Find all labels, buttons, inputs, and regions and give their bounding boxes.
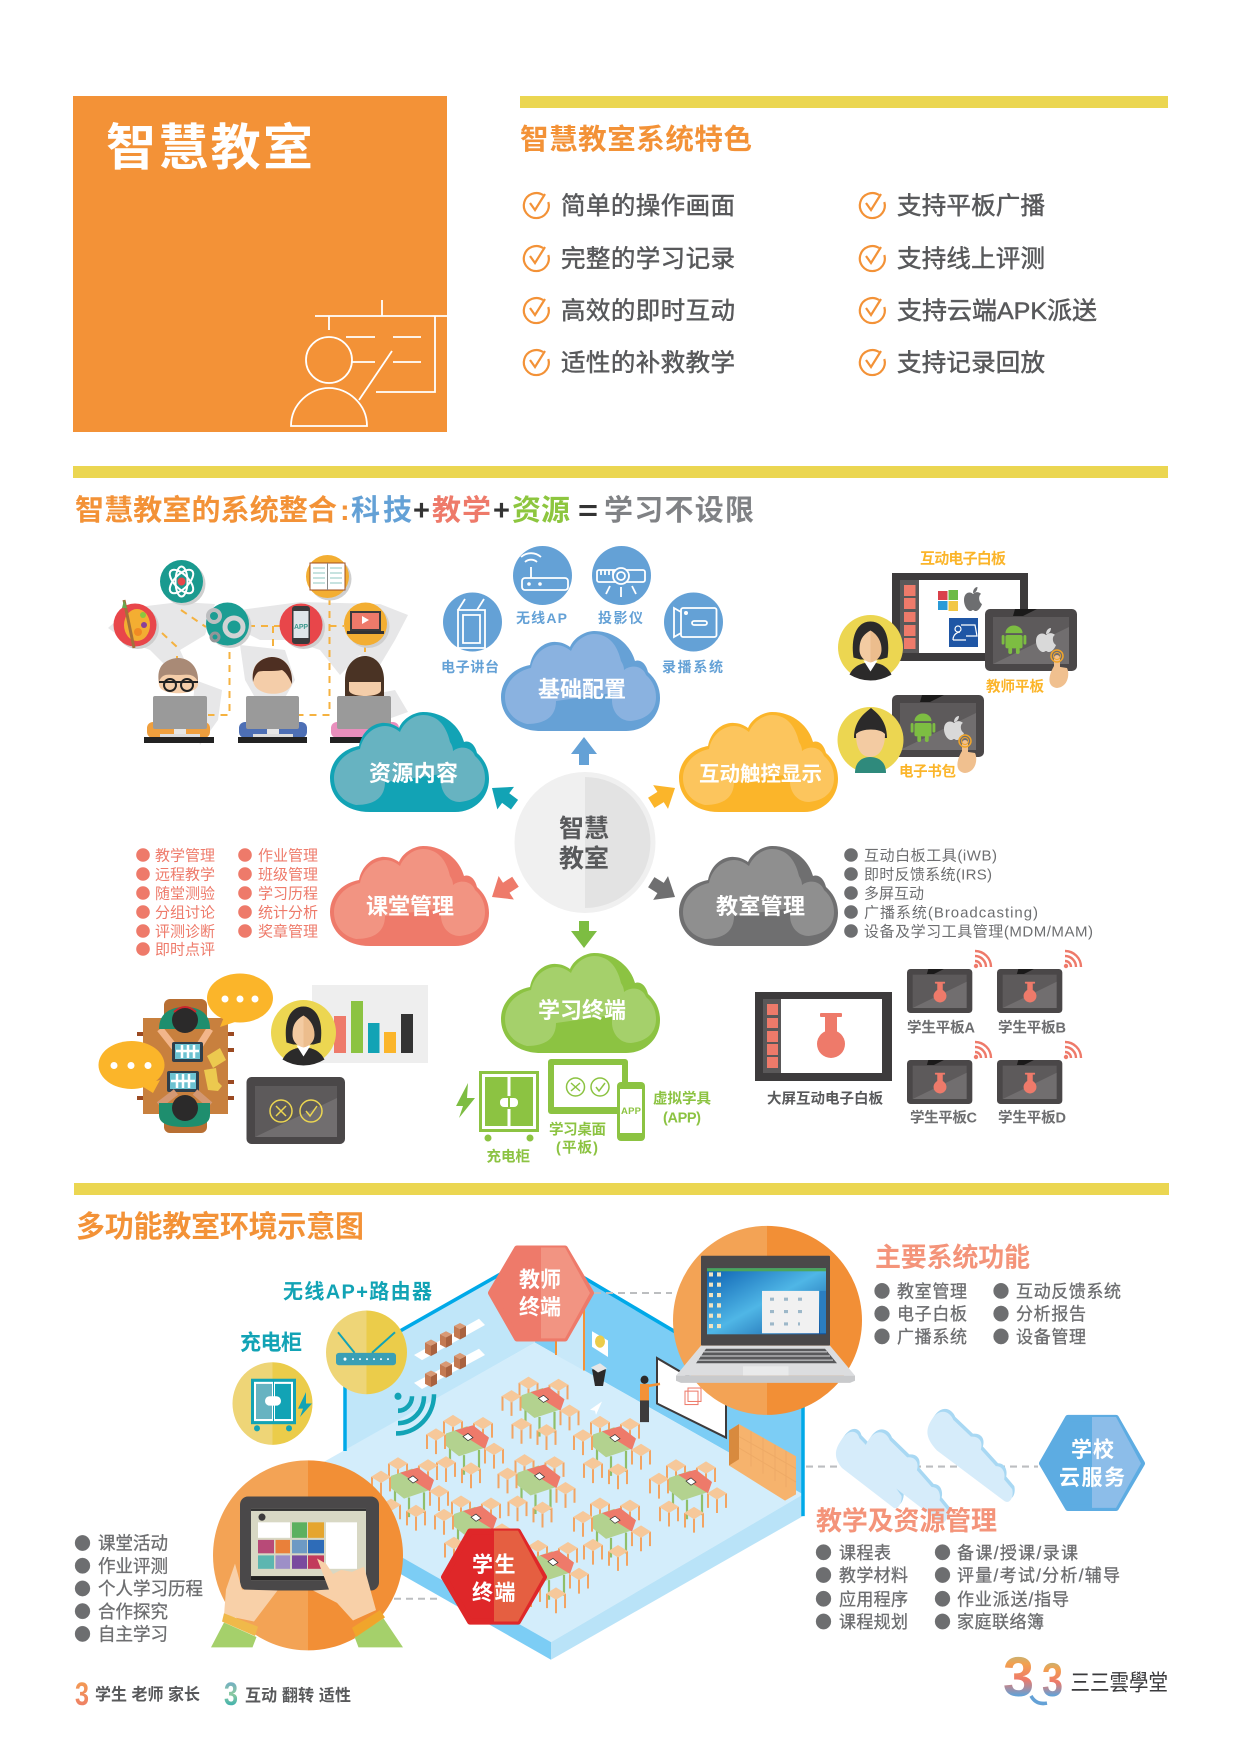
avatar: student (838, 707, 904, 773)
big whiteboard (755, 992, 892, 1081)
heading: system integration: 学习不设限 (604, 494, 754, 527)
list: classroom management features: 作业管理 (258, 848, 318, 864)
list: main system functions: 设备管理 (1016, 1327, 1086, 1347)
list: teaching and resource management: 教学材料 (839, 1565, 908, 1586)
icon: teal wireless signal (394, 1393, 434, 1433)
speech bubble (207, 974, 273, 1027)
feature item: 支持线上评测 (897, 245, 1045, 273)
heading: system integration: + (493, 495, 510, 527)
label: 学习桌面 (549, 1120, 606, 1138)
student bottom (159, 1092, 210, 1127)
footer tagline: three roles (75, 1676, 200, 1712)
label: (平板) (556, 1138, 598, 1156)
label: 大屏互动电子白板 (767, 1090, 884, 1108)
logo (1003, 1645, 1168, 1708)
footer tagline: three roles: 学生 老师 家长 (95, 1685, 200, 1704)
panel: learning terminals (456, 1059, 712, 1166)
icon: gears (206, 602, 252, 648)
bar chart (312, 985, 428, 1063)
arrow: gray (644, 870, 682, 909)
feature item: 支持记录回放 (897, 349, 1045, 377)
list: main system functions: 电子白板 (897, 1304, 967, 1324)
icon: bolt (456, 1083, 475, 1118)
label: 教师平板 (986, 678, 1044, 696)
cloud: learning terminal (501, 953, 660, 1053)
cloud: learning terminal: 学习终端 (538, 998, 626, 1023)
list: student terminal features (75, 1533, 203, 1645)
person: man with glasses (144, 658, 214, 743)
cloud: interactive touch display (679, 712, 838, 812)
dashed connectors (394, 1293, 1038, 1599)
tablet with answers (246, 1077, 345, 1144)
icon: projector (592, 546, 651, 605)
label: 投影仪 (598, 610, 643, 626)
label: charging cabinet: 充电柜 (240, 1330, 302, 1355)
heading: system integration: : (340, 495, 350, 527)
speech bubble (98, 1041, 164, 1093)
list: main system functions: 教室管理 (897, 1281, 967, 1301)
feature item: 适性的补救教学 (561, 349, 735, 377)
sticky notes (204, 1048, 226, 1091)
list: teaching and resource management (816, 1543, 1120, 1632)
list: teaching and resource management: 作业派送/指导 (957, 1589, 1069, 1609)
student tablet B (997, 951, 1081, 1036)
divider bar: top right (520, 96, 1168, 108)
heading: system integration: = (578, 495, 598, 527)
hexagon: school cloud service: 云服务 (1059, 1466, 1125, 1490)
label: 虚拟学具 (653, 1090, 712, 1108)
shelves (414, 1319, 485, 1389)
list: room management features: 广播系统(Broadcasting) (864, 904, 1038, 922)
cloud: basic configuration: 基础配置 (538, 677, 626, 702)
student tablet C: 学生平板C (910, 1108, 978, 1126)
cloud: resource content: 资源内容 (369, 761, 458, 786)
logo: 3 (1003, 1645, 1034, 1708)
list: main system functions: 分析报告 (1016, 1304, 1086, 1324)
student table groups (371, 1377, 727, 1613)
feature item: 高效的即时互动 (561, 297, 735, 325)
footer tagline: three roles: 3 (75, 1676, 89, 1712)
cloud: resource content (330, 712, 489, 812)
hexagon: teacher terminal: 终端 (519, 1295, 561, 1320)
list: classroom management features: 远程教学 (155, 866, 215, 884)
avatar: teacher (271, 1000, 336, 1066)
list: student terminal features: 自主学习 (98, 1624, 168, 1645)
hexagon: school cloud service (1042, 1417, 1142, 1508)
heading: system integration: 科技 (351, 494, 412, 527)
teacher figure (640, 1376, 660, 1422)
teacher tablet (985, 609, 1077, 688)
divider bar: bottom (74, 1183, 1169, 1195)
label: 电子书包 (899, 762, 956, 780)
list: teaching and resource management: 课程表 (839, 1543, 891, 1563)
hexagon: student terminal (444, 1531, 544, 1622)
cloud: classroom management (330, 846, 489, 946)
heading: main system functions: 主要系统功能 (875, 1242, 1030, 1273)
student tablet B: 学生平板B (998, 1018, 1066, 1036)
central hub (514, 772, 656, 913)
student tablet D: 学生平板D (998, 1108, 1066, 1126)
trash bin (591, 1363, 607, 1386)
student tablet A: 学生平板A (907, 1018, 976, 1036)
world map (108, 602, 408, 745)
door (556, 1303, 584, 1370)
icon: router circle (326, 1311, 407, 1394)
list: classroom management features: 奖章管理 (258, 922, 318, 940)
feature item: 简单的操作画面 (561, 192, 735, 220)
list: classroom management features: 教学管理 (155, 848, 215, 864)
panel: collaborative table (98, 974, 428, 1144)
heading: environment diagram: 多功能教室环境示意图 (76, 1211, 364, 1244)
cloud: room management: 教室管理 (716, 894, 805, 919)
interactive whiteboard (892, 573, 1028, 661)
arrow: up blue (571, 737, 597, 765)
isometric classroom (279, 1252, 803, 1660)
circle: teacher laptop (673, 1226, 862, 1415)
icon: charging cabinet circle (232, 1362, 312, 1445)
panel: resource content illustration (108, 555, 408, 745)
panel: interactive display devices (838, 550, 1077, 780)
label: 电子讲台 (441, 659, 499, 675)
title: 智慧教室 (106, 120, 313, 176)
list: room management features: 多屏互动 (864, 886, 924, 902)
whiteboard on wall (657, 1358, 726, 1438)
person: man (238, 657, 307, 743)
icon: book (306, 555, 352, 600)
divider bar: middle (73, 466, 1168, 478)
list: teaching and resource management: 评量/考试/分析/辅导 (957, 1565, 1120, 1586)
dashed connectors (162, 598, 365, 715)
hexagon: school cloud service: 学校 (1071, 1437, 1114, 1462)
list: teaching and resource management: 备课/授课/录课 (957, 1543, 1078, 1563)
table (137, 999, 234, 1133)
list: teaching and resource management: 课程规划 (839, 1612, 908, 1632)
label: 充电柜 (486, 1148, 530, 1166)
hexagon: teacher terminal (491, 1248, 591, 1338)
arrow: down green (571, 921, 597, 948)
feature list (524, 192, 1097, 377)
sleeves (211, 1610, 403, 1647)
icon: app phone (280, 604, 325, 649)
feature item: 支持平板广播 (897, 192, 1045, 220)
list: room management features: 设备及学习工具管理(MDM/MAM) (864, 924, 1093, 940)
label: 无线AP (516, 610, 567, 626)
arrow: red (484, 870, 523, 909)
bookshelf (729, 1424, 796, 1501)
student tablet A (907, 951, 991, 1036)
circle: student tablet in hands (211, 1460, 403, 1650)
list: student terminal features: 个人学习历程 (98, 1579, 203, 1599)
footer tagline: three features (224, 1676, 351, 1712)
list: classroom management features: 统计分析 (258, 904, 318, 922)
person: woman (330, 656, 400, 743)
logo: 3 (1042, 1653, 1063, 1706)
heading: system integration: 资源 (512, 494, 570, 527)
icon: tablet (548, 1059, 628, 1114)
icon: wireless AP (513, 546, 572, 605)
label: 互动电子白板 (920, 550, 1006, 568)
footer tagline: three features: 互动 翻转 适性 (245, 1686, 351, 1705)
icon: atom (160, 560, 206, 606)
tablet bottom (167, 1071, 199, 1092)
student top (159, 1007, 210, 1048)
wall sign (592, 1331, 608, 1357)
heading: system integration (75, 494, 754, 527)
panel: title block (73, 96, 447, 432)
list: classroom management features (136, 848, 318, 958)
list: classroom management features: 即时点评 (155, 942, 215, 958)
cloud: interactive touch display: 互动触控显示 (699, 763, 822, 786)
cloud: basic configuration (501, 631, 660, 731)
cloud: classroom management: 课堂管理 (366, 894, 454, 919)
icon: app phone: APP (294, 624, 308, 631)
icon: video laptop (344, 602, 390, 648)
walls and floor (279, 1252, 803, 1660)
list: teaching and resource management: 家庭联络簿 (957, 1612, 1044, 1632)
list: main system functions (874, 1281, 1121, 1347)
section: multifunction classroom environment (75, 1211, 1168, 1712)
feature item: 完整的学习记录 (561, 245, 735, 273)
paper plane (590, 1401, 602, 1415)
hands (224, 1558, 376, 1622)
list: room management features: 互动白板工具(iWB) (864, 846, 997, 864)
central hub: 智慧 (559, 815, 609, 843)
list: student terminal features: 作业评测 (98, 1556, 168, 1576)
list: main system functions: 互动反馈系统 (1016, 1281, 1121, 1301)
icon: recording system (664, 592, 723, 652)
hexagon: teacher terminal: 教师 (519, 1267, 561, 1292)
laptop base (676, 1346, 855, 1383)
list: student terminal features: 课堂活动 (98, 1533, 168, 1554)
student tablet (892, 695, 984, 773)
list: room management features (844, 846, 1093, 940)
icon: electronic podium (443, 592, 502, 652)
cloud: room management (679, 846, 838, 946)
list: classroom management features: 班级管理 (258, 866, 318, 884)
laptop screen (701, 1256, 830, 1346)
list: main system functions: 广播系统 (897, 1327, 967, 1347)
list: classroom management features: 分组讨论 (155, 904, 215, 922)
list: classroom management features: 评测诊断 (155, 924, 215, 940)
feature item: 支持云端APK派送 (897, 297, 1097, 325)
tablet (240, 1496, 379, 1591)
hexagon: student terminal: 学生 (472, 1553, 516, 1577)
panel: basic configuration icons (441, 546, 723, 675)
list: classroom management features: 随堂测验 (155, 886, 215, 902)
icon: teacher at board (291, 300, 447, 426)
icon: charging cabinet (479, 1071, 539, 1142)
hexagon: student terminal: 终端 (472, 1581, 516, 1605)
logo: 三三雲學堂 (1070, 1670, 1168, 1696)
heading: system integration: + (413, 495, 430, 527)
student tablet C (907, 1042, 991, 1126)
heading: system integration: 教学 (432, 494, 491, 527)
heading: system features: 智慧教室系统特色 (520, 124, 752, 156)
tablet top (172, 1042, 203, 1062)
heading: system integration: 智慧教室的系统整合 (75, 494, 337, 527)
student tablet D (997, 1042, 1081, 1126)
central hub: 教室 (559, 844, 609, 873)
footer tagline: three features: 3 (224, 1676, 238, 1712)
label: 录播系统 (662, 659, 723, 675)
arrow: teal (484, 777, 523, 816)
list: teaching and resource management: 应用程序 (839, 1589, 908, 1609)
list: student terminal features: 合作探究 (98, 1602, 168, 1622)
icon: phone app (617, 1082, 645, 1141)
label: (APP) (663, 1110, 701, 1126)
label: wireless AP router: 无线AP+路由器 (283, 1280, 433, 1304)
isometric clouds (829, 1405, 1031, 1525)
arrow: orange (644, 776, 682, 815)
list: classroom management features: 学习历程 (258, 886, 318, 902)
icon: phone app: APP (621, 1106, 642, 1117)
list: room management features: 即时反馈系统(IRS) (864, 866, 992, 884)
heading: teaching and resource management: 教学及资源管理 (816, 1506, 997, 1536)
avatar: teacher (838, 615, 903, 680)
icon: palette (114, 600, 159, 649)
panel: big screen and student tablets (755, 951, 1081, 1126)
